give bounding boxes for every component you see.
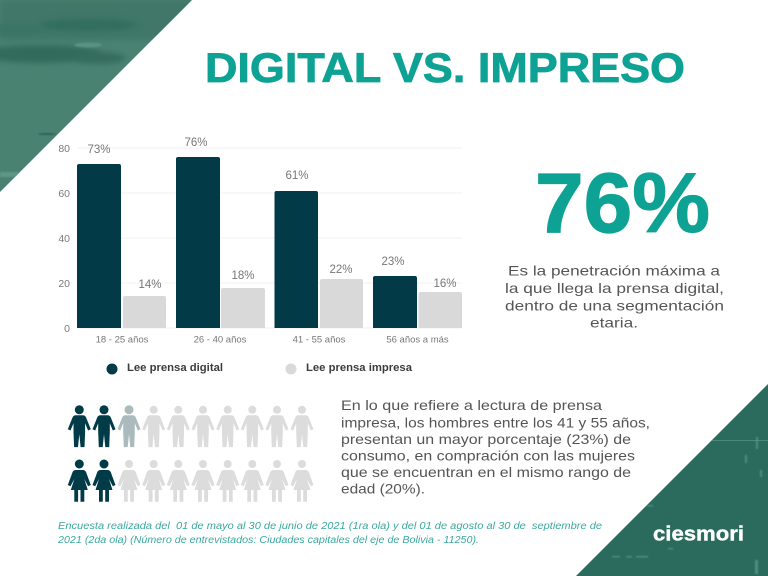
- legend: Lee prensa digital: [127, 362, 223, 374]
- pictogram: men: [68, 405, 314, 447]
- body paragraph: presentan un mayor porcentaje (23%) de: [341, 431, 631, 447]
- decorative corner: bottom-right photo triangle: [576, 384, 768, 576]
- stat description: [505, 262, 724, 330]
- stat description: dentro de una segmentación: [505, 298, 724, 314]
- legend: Lee prensa impresa: [306, 362, 413, 374]
- decorative corner: top-left photo triangle: [0, 0, 192, 192]
- x axis labels: 56 años a más: [386, 334, 449, 346]
- stat description: etaria.: [590, 314, 638, 330]
- body paragraph: En lo que refiere a lectura de prensa: [341, 397, 602, 413]
- value labels: 22%: [329, 264, 353, 276]
- value labels: 18%: [231, 270, 255, 282]
- value labels: 61%: [285, 170, 309, 182]
- body paragraph: edad (20%).: [341, 480, 425, 496]
- body paragraph: que se encuentran en el mismo rango de: [341, 464, 631, 480]
- body paragraph: [341, 397, 650, 496]
- source note: Encuesta realizada del 01 de mayo al 30 de junio de 2021 (1ra ola) y del 01 de agosto al 30 de septiembre de: [58, 521, 602, 532]
- y axis labels: 80: [58, 143, 70, 155]
- value labels: 16%: [433, 278, 457, 290]
- y axis labels: [58, 143, 70, 335]
- y axis labels: 20: [58, 278, 70, 290]
- value labels: [87, 137, 457, 291]
- title: DIGITAL VS. IMPRESO: [205, 44, 685, 91]
- stat description: Es la penetración máxima a: [508, 262, 720, 278]
- pictogram: women: [68, 460, 314, 502]
- legend: [106, 362, 413, 374]
- y axis labels: 0: [64, 323, 70, 335]
- value labels: 73%: [87, 144, 111, 156]
- source note: [57, 521, 602, 546]
- y axis labels: 40: [58, 233, 70, 245]
- source note: 2021 (2da ola) (Número de entrevistados: Ciudades capitales del eje de Bolivia - 11250).: [57, 535, 479, 546]
- value labels: 23%: [381, 256, 405, 268]
- body paragraph: impresa, los hombres entre los 41 y 55 años,: [341, 414, 650, 430]
- digital bars: [77, 157, 417, 328]
- x axis labels: 18 - 25 años: [96, 334, 149, 346]
- x axis labels: [96, 334, 449, 346]
- bar chart: digital vs impreso by age: [58, 137, 462, 346]
- gridlines: [77, 148, 462, 328]
- y axis labels: 60: [58, 188, 70, 200]
- x axis labels: 26 - 40 años: [194, 334, 247, 346]
- value labels: 76%: [184, 137, 208, 149]
- body paragraph: consumo, en compración con las mujeres: [341, 448, 635, 464]
- value labels: 14%: [138, 279, 162, 291]
- logo: ciesmori: ciesmori: [653, 524, 744, 546]
- stat description: la que llega la prensa digital,: [505, 280, 724, 296]
- x axis labels: 41 - 55 años: [293, 334, 346, 346]
- big stat: 76%: [535, 156, 710, 250]
- impresa bars: [123, 279, 462, 328]
